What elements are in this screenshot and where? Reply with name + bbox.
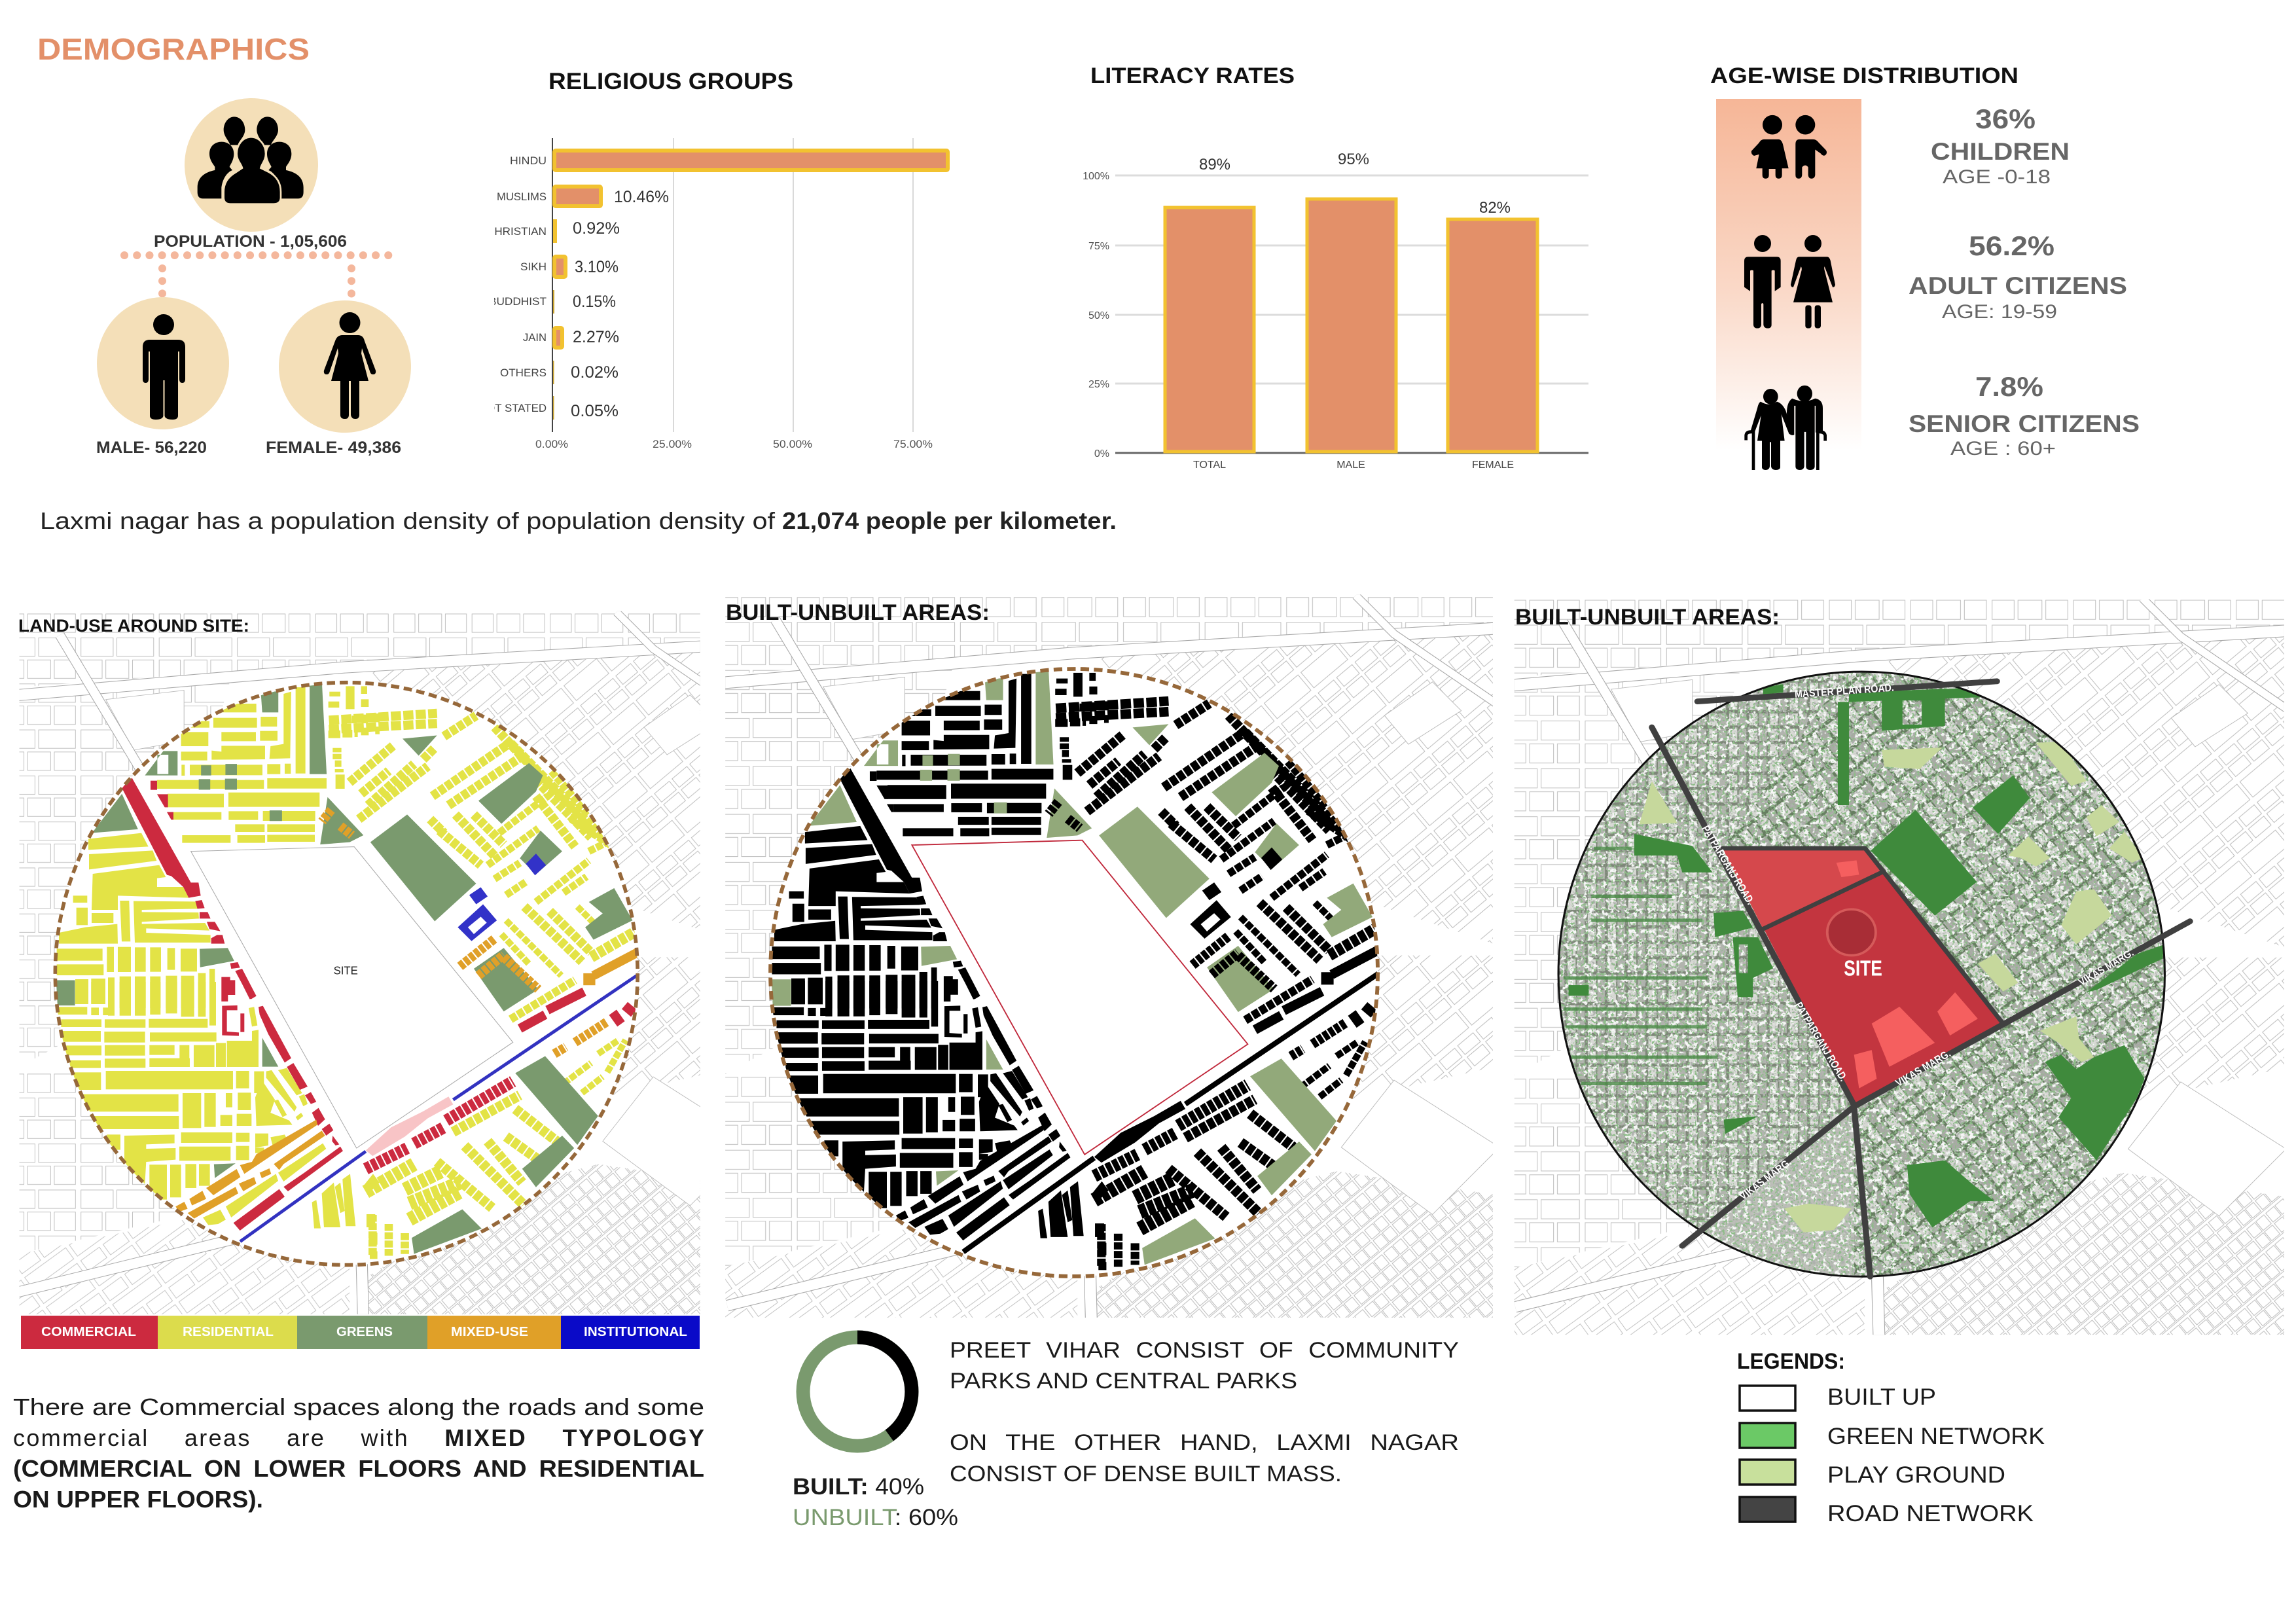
heading: BUILT-UNBUILT AREAS:: [1515, 605, 1780, 630]
stat: children: AGE -0-18: [1943, 166, 2051, 188]
site polygon: [1723, 848, 2003, 1105]
stat: children: 36%: [1975, 103, 2036, 134]
green network: [1568, 684, 2164, 1227]
stat: children: CHILDREN: [1931, 138, 2070, 165]
text: commercial note: [13, 1394, 704, 1513]
bar chart: 95%: [1338, 151, 1369, 168]
text: commercial note: commercial areas are with MIXED TYPOLOGY: [13, 1424, 704, 1451]
stat: seniors: [1909, 371, 2140, 460]
land-use circle: [55, 683, 638, 1265]
text: population density: Laxmi nagar has a population density of population density of: [40, 507, 776, 534]
stat: adults: [1909, 230, 2127, 323]
panel: religious groups: [478, 69, 948, 450]
text: commercial note: There are Commercial spaces along the roads and some: [13, 1394, 704, 1420]
title: DEMOGRAPHICS: [37, 32, 310, 66]
gradient band: [1716, 99, 1861, 450]
bar chart: SIKH: [520, 261, 547, 273]
bar chart: OTHERS: [500, 367, 547, 379]
stat: adults: ADULT CITIZENS: [1909, 272, 2127, 299]
text: commercial note: ON UPPER FLOORS).: [13, 1486, 263, 1513]
site label: SITE: [1844, 956, 1882, 981]
panel: population: [96, 98, 411, 457]
stat: seniors: SENIOR CITIZENS: [1909, 410, 2140, 437]
bar chart: CHRISTIAN: [486, 225, 547, 238]
heading: LAND-USE AROUND SITE:: [18, 616, 249, 636]
road labels: VIKAS MARG.: [2076, 946, 2136, 988]
play grounds: [1640, 742, 2143, 1233]
donut labels: UNBUILT : 60%: [793, 1505, 958, 1530]
bar chart: TOTAL: [1193, 460, 1226, 471]
heading: BUILT-UNBUILT AREAS:: [726, 600, 990, 625]
bar chart: 0.05%: [571, 402, 619, 420]
roads: [1652, 681, 2190, 1276]
road labels: [1699, 681, 2136, 1202]
bar chart: 2.27%: [573, 328, 619, 346]
bar chart: MALE: [1336, 460, 1365, 471]
stat: children: [1931, 103, 2070, 188]
legend bar: GREENS: [336, 1325, 393, 1339]
bar chart: NOT STATED: [478, 402, 547, 414]
road labels: PATPARGANJ ROAD.: [1792, 1000, 1850, 1083]
bar chart: 10.46%: [614, 188, 669, 206]
figure-ground circle: [770, 669, 1378, 1276]
icon: adults: [1744, 235, 1835, 329]
donut labels: [793, 1474, 958, 1530]
bar chart: MUSLIMS: [497, 190, 547, 203]
legend: PLAY GROUND: [1827, 1462, 2005, 1488]
heading: RELIGIOUS GROUPS: [548, 69, 793, 94]
bar chart: 0.00%: [535, 438, 568, 450]
bar chart: 0.92%: [573, 219, 620, 238]
panel: built-unbuilt map: [723, 591, 1499, 1530]
donut labels: BUILT: 40%: [793, 1474, 924, 1500]
bar chart: 0%: [1094, 448, 1109, 460]
label: population: POPULATION - 1,05,606: [154, 232, 347, 251]
panel: green network map: [1511, 594, 2286, 1526]
text: preet vihar note: ON THE OTHER HAND, LAXMI NAGAR: [950, 1430, 1459, 1455]
bar chart: BUDDHIST: [489, 295, 547, 308]
aerial circle: [1551, 661, 2190, 1285]
legend bar: MIXED-USE: [451, 1325, 528, 1339]
legend bar: [21, 1316, 700, 1349]
stat: seniors: 7.8%: [1975, 371, 2043, 402]
road labels: PATPARGANJ ROAD.: [1699, 823, 1757, 907]
bar chart: 0.15%: [573, 293, 616, 311]
panel: age-wise distribution: [1710, 63, 2140, 470]
legend bar: INSTITUTIONAL: [584, 1325, 687, 1339]
bar chart: 50%: [1088, 310, 1109, 321]
heading: AGE-WISE DISTRIBUTION: [1710, 63, 2018, 88]
street base map: [20, 611, 700, 1314]
label: female: FEMALE- 49,386: [266, 439, 401, 457]
bar chart: 89%: [1199, 156, 1230, 173]
road labels: MASTER PLAN ROAD.: [1794, 681, 1894, 700]
bar chart: 50.00%: [773, 438, 812, 450]
stat: seniors: AGE : 60+: [1950, 438, 2056, 460]
road labels: VIKAS MARG.: [1736, 1156, 1794, 1202]
bar chart: 25.00%: [653, 438, 692, 450]
bar chart: 75.00%: [893, 438, 933, 450]
bar chart: 82%: [1479, 199, 1511, 217]
icon: male: [97, 297, 229, 429]
icon: seniors: [1746, 386, 1825, 470]
legend: GREEN NETWORK: [1827, 1424, 2045, 1449]
donut chart: [803, 1337, 912, 1446]
icon: female: [279, 300, 411, 433]
bar chart: 0.02%: [571, 363, 619, 382]
legend bar: RESIDENTIAL: [183, 1325, 274, 1339]
text: population density: [40, 507, 1117, 534]
road labels: VIKAS MARG.: [1893, 1047, 1953, 1089]
text: preet vihar note: CONSIST OF DENSE BUILT MASS.: [950, 1462, 1342, 1487]
stat: adults: AGE: 19-59: [1942, 301, 2057, 323]
bar chart: 25%: [1088, 379, 1109, 390]
icon: children: [1751, 115, 1827, 179]
stat: adults: 56.2%: [1969, 230, 2054, 261]
bar chart: FEMALE: [1472, 460, 1514, 471]
text: preet vihar note: PARKS AND CENTRAL PARKS: [950, 1369, 1297, 1394]
bar chart: 100%: [1083, 171, 1109, 182]
text: preet vihar note: PREET VIHAR CONSIST OF COMMUNITY: [950, 1338, 1459, 1363]
legend bar: COMMERCIAL: [41, 1325, 136, 1339]
dotted connector: [124, 255, 390, 295]
legend: ROAD NETWORK: [1827, 1501, 2034, 1526]
street base map: [723, 591, 1499, 1339]
bar chart: [1083, 151, 1588, 471]
text: preet vihar note: [950, 1338, 1459, 1487]
panel: land-use map: [9, 607, 755, 1513]
legend: BUILT UP: [1827, 1384, 1936, 1410]
legend: [1737, 1349, 2045, 1526]
heading: LITERACY RATES: [1090, 63, 1295, 88]
icon: population group: [185, 98, 318, 232]
site label: SITE: [334, 964, 358, 977]
bar chart: HINDU: [510, 154, 547, 167]
street base map: [1511, 594, 2286, 1341]
label: male: MALE- 56,220: [96, 439, 207, 457]
text: commercial note: (COMMERCIAL ON LOWER FLOORS AND RESIDENTIAL: [13, 1455, 704, 1482]
text: population density: 21,074 people per kilometer.: [782, 507, 1117, 534]
bar chart: 3.10%: [575, 258, 619, 276]
panel: literacy rates: [1083, 63, 1588, 471]
bar chart: 75%: [1088, 241, 1109, 252]
bar chart: JAIN: [523, 331, 547, 344]
bar chart: [478, 138, 948, 450]
legend: LEGENDS:: [1737, 1349, 1845, 1374]
